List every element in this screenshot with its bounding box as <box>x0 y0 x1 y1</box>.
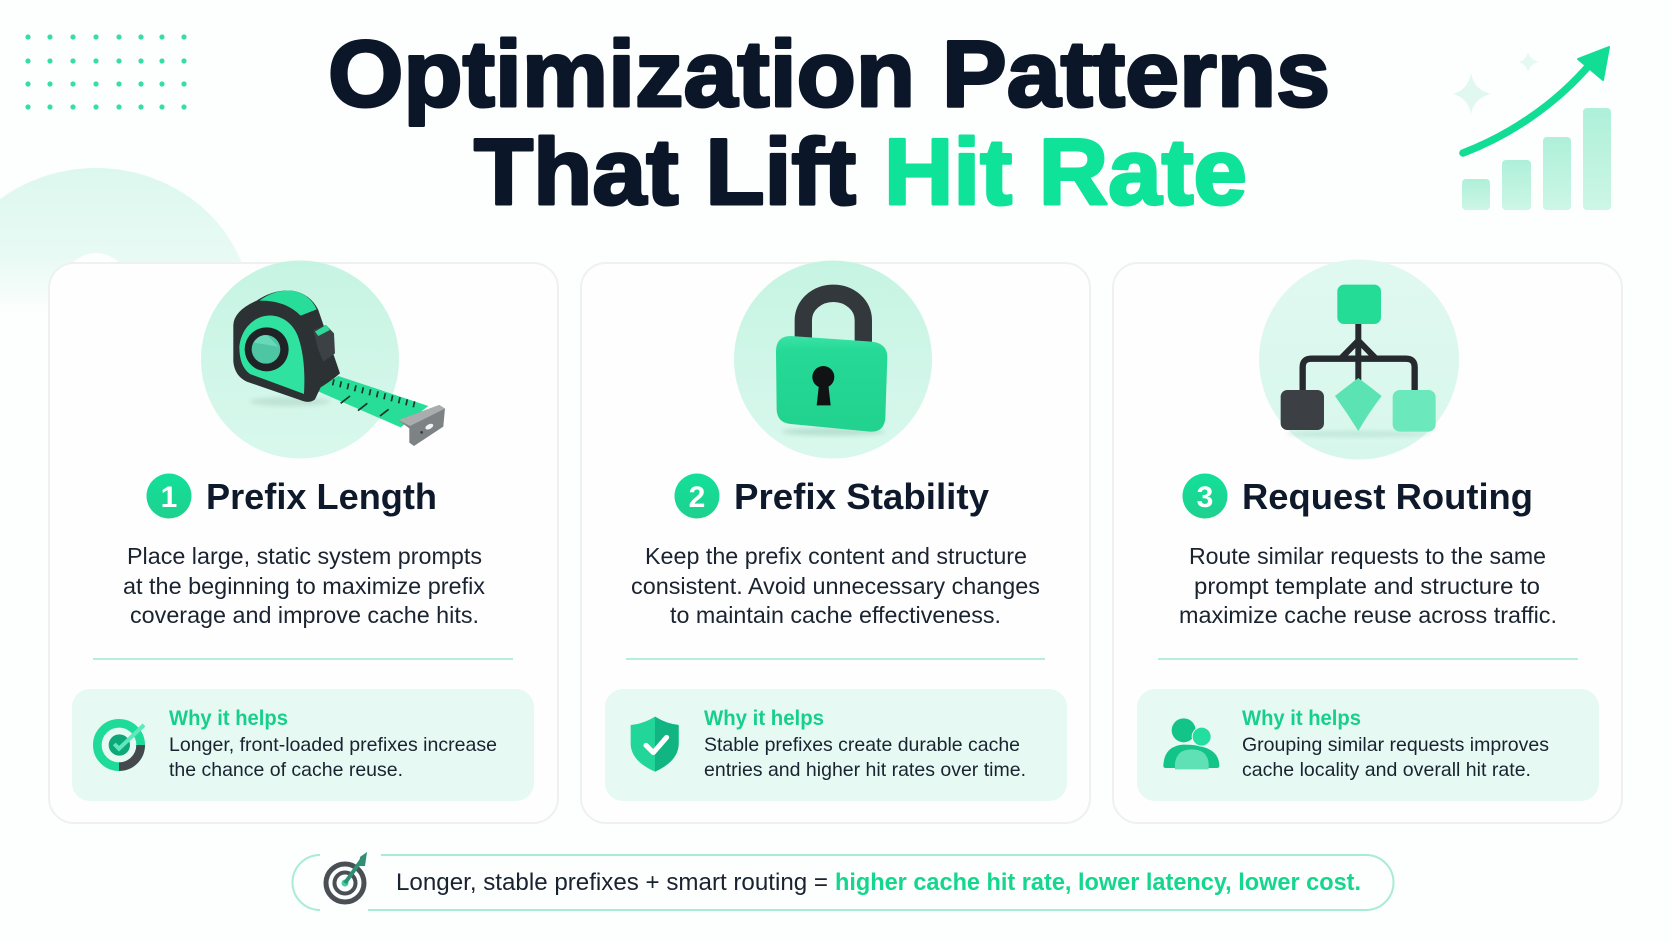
callout: why it helps <box>605 689 1067 801</box>
callout: why it helps: Grouping similar requests improves <box>1242 734 1549 756</box>
text block: request routing description: Route similar requests to the same <box>1189 543 1546 569</box>
callout: why it helps <box>72 689 534 801</box>
text block: prefix stability description <box>631 543 1040 628</box>
number badge 1 <box>146 474 192 518</box>
text block: prefix stability description: Keep the prefix content and structure <box>645 543 1027 569</box>
number badge 3: 3 <box>1197 481 1213 514</box>
callout: why it helps: Stable prefixes create durable cache <box>704 734 1020 756</box>
heading: request routing: Request Routing <box>1242 476 1533 517</box>
panel: prefix length <box>49 260 558 823</box>
panel: prefix stability <box>581 260 1090 823</box>
number badge 1: 1 <box>161 481 177 514</box>
title: Hit Rate <box>884 119 1247 224</box>
icon: rising bar chart with arrow <box>1453 47 1611 210</box>
text: summary statement: higher cache hit rate, lower latency, lower cost. <box>835 869 1361 896</box>
icon: routing flow diagram <box>1259 260 1459 460</box>
number badge 2: 2 <box>689 481 705 514</box>
heading: prefix stability: Prefix Stability <box>734 476 989 517</box>
text block: request routing description <box>1179 543 1557 628</box>
text: summary statement <box>396 869 1361 896</box>
text block: prefix length description <box>123 543 485 628</box>
title <box>328 21 1330 224</box>
number badge 3 <box>1182 474 1228 518</box>
panel: request routing <box>1113 260 1622 823</box>
number badge 2 <box>674 474 720 518</box>
heading: prefix length: Prefix Length <box>206 476 437 517</box>
icon: bullseye with arrow <box>326 852 367 902</box>
icon: group of people <box>1163 718 1219 769</box>
text block: request routing description: prompt template and structure to <box>1194 573 1540 599</box>
callout: why it helps: the chance of cache reuse. <box>169 759 403 781</box>
icon: padlock <box>734 260 932 458</box>
summary pill <box>292 852 1393 910</box>
text block: prefix length description: Place large, static system prompts <box>127 543 482 569</box>
title: That Lift <box>474 119 856 224</box>
background arch shape <box>0 168 252 420</box>
text block: prefix length description: coverage and improve cache hits. <box>130 602 479 628</box>
callout: why it helps: Why it helps <box>1242 707 1361 730</box>
text block: request routing description: maximize cache reuse across traffic. <box>1179 602 1557 628</box>
text block: prefix stability description: consistent. Avoid unnecessary changes <box>631 573 1040 599</box>
icon: target with check <box>97 723 144 767</box>
text: summary statement: Longer, stable prefixes + smart routing = <box>396 869 828 896</box>
callout: why it helps <box>1137 689 1599 801</box>
callout: why it helps: entries and higher hit rates over time. <box>704 759 1026 781</box>
callout: why it helps: Why it helps <box>169 707 288 730</box>
icon: shield with check <box>631 717 679 772</box>
callout: why it helps: cache locality and overall hit rate. <box>1242 759 1531 781</box>
title: Optimization Patterns <box>328 21 1330 126</box>
text block: prefix stability description: to maintain cache effectiveness. <box>670 602 1001 628</box>
icon: tape measure <box>201 260 445 458</box>
dot grid decoration <box>25 34 187 110</box>
text block: prefix length description: at the beginning to maximize prefix <box>123 573 485 599</box>
callout: why it helps: Why it helps <box>704 707 824 730</box>
callout: why it helps: Longer, front-loaded prefixes increase <box>169 734 497 756</box>
